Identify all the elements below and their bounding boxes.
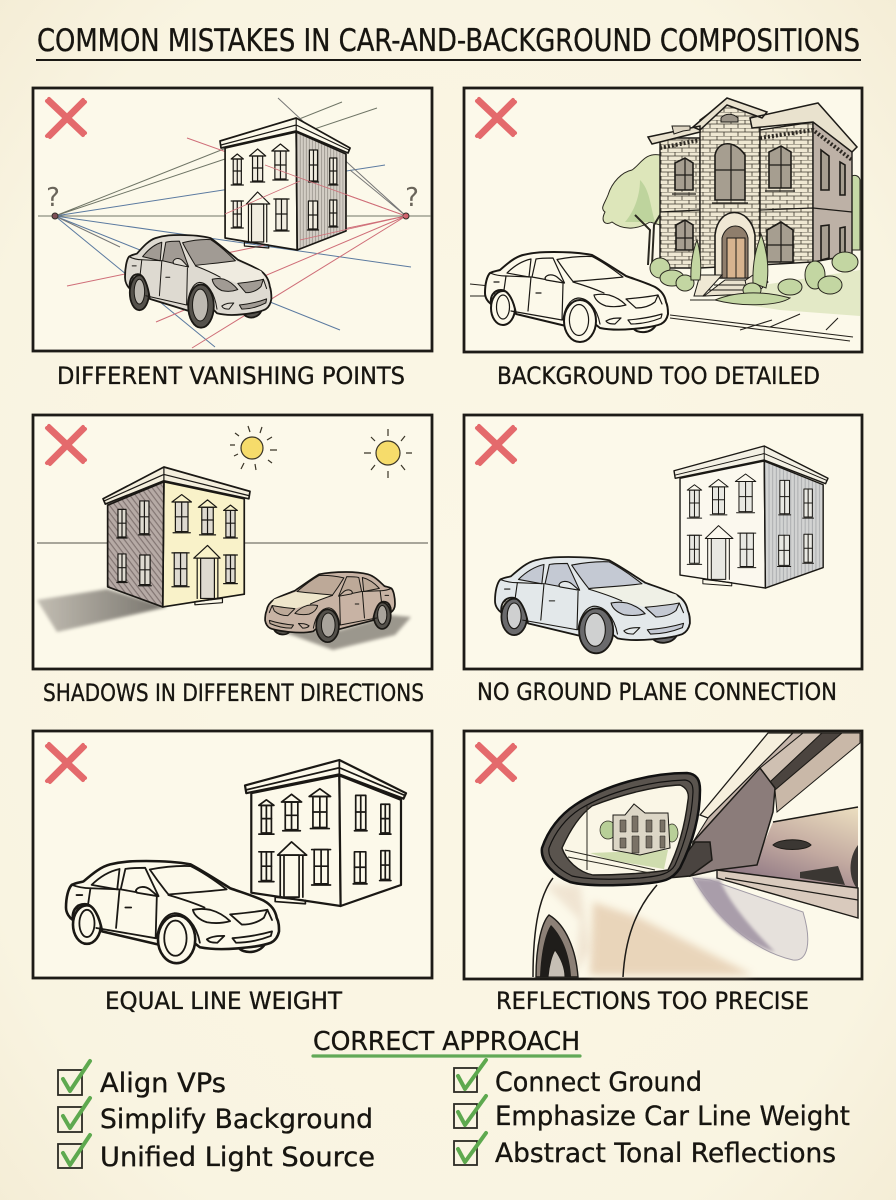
building <box>103 467 250 607</box>
building <box>674 446 828 588</box>
vanishing point left: ? <box>46 183 60 213</box>
sun right <box>364 429 412 478</box>
car <box>495 557 690 653</box>
item: connect ground <box>454 1060 702 1098</box>
sun left <box>230 426 277 470</box>
icon: red X mistake mark <box>477 744 515 782</box>
item: align VPs <box>58 1061 226 1099</box>
car <box>66 861 279 963</box>
icon: red X mistake mark <box>477 99 515 137</box>
car: plain outline <box>485 252 668 342</box>
car <box>265 572 395 642</box>
checklist right <box>454 1060 850 1169</box>
item: unified light source: Unified Light Source <box>100 1142 375 1173</box>
item: simplify background: Simplify Background <box>100 1104 373 1135</box>
tree right <box>849 175 860 250</box>
item: align VPs: Align VPs <box>100 1068 226 1099</box>
panel: different vanishing points <box>33 88 432 351</box>
icon: red X mistake mark <box>47 99 85 137</box>
building <box>220 118 350 250</box>
icon: red X mistake mark <box>477 426 515 464</box>
shrubs <box>650 234 858 305</box>
reflected building <box>600 804 678 855</box>
tree left <box>603 155 660 265</box>
building <box>245 760 406 906</box>
detailed building <box>648 98 857 296</box>
item: abstract tonal reflections: Abstract Tonal Reflections <box>495 1138 836 1169</box>
building shadow <box>37 589 167 632</box>
item: connect ground: Connect Ground <box>495 1067 702 1098</box>
car door and fender <box>533 878 808 977</box>
horizon <box>37 542 428 544</box>
side mirror with reflection <box>542 773 712 885</box>
caption: NO GROUND PLANE CONNECTION <box>477 678 837 706</box>
heading: correct approach: CORRECT APPROACH <box>313 1027 580 1057</box>
panel: equal line weight <box>33 731 432 978</box>
panel: shadows in different directions <box>33 415 432 669</box>
caption: EQUAL LINE WEIGHT <box>105 987 342 1015</box>
caption: SHADOWS IN DIFFERENT DIRECTIONS <box>43 679 424 707</box>
window frame and interior <box>690 733 860 918</box>
vanishing point right: ? <box>405 183 419 213</box>
icon: red X mistake mark <box>47 426 85 464</box>
car <box>125 235 271 328</box>
panel: reflections too precise <box>464 731 862 979</box>
perspective lines from two vanishing points <box>38 98 431 348</box>
icon: red X mistake mark <box>47 744 85 782</box>
caption: BACKGROUND TOO DETAILED <box>497 362 820 390</box>
panel: background too detailed <box>464 88 862 352</box>
car shadow <box>278 615 411 650</box>
lawn and sidewalk <box>715 270 860 316</box>
panel: no ground plane connection <box>464 415 862 669</box>
mirror glass <box>562 785 688 875</box>
caption: DIFFERENT VANISHING POINTS <box>57 362 405 390</box>
item: emphasize car line weight: Emphasize Car Line Weight <box>495 1101 850 1132</box>
checklist left <box>58 1061 375 1173</box>
caption: REFLECTIONS TOO PRECISE <box>496 987 809 1015</box>
